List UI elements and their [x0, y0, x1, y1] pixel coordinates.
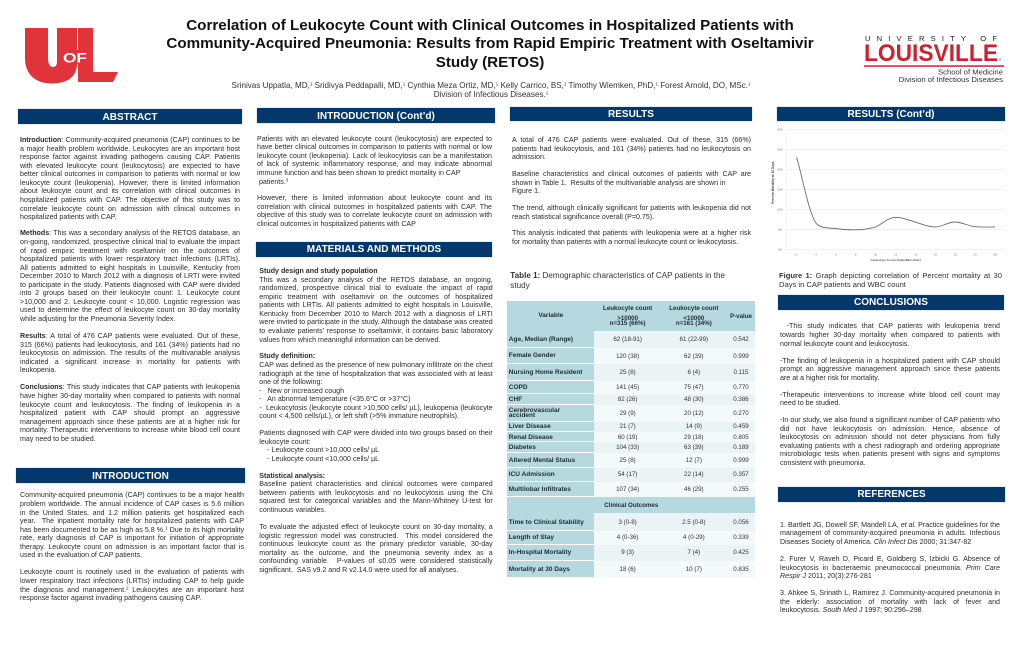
table: demographics and outcomes: 20 (12)	[684, 410, 704, 417]
line chart: percent mortality by leukocyte count: 16	[934, 253, 937, 257]
text: abstract introduction: hospitalized patients with CAP. The objective of this study was to	[20, 196, 240, 204]
text: study design: Kentucky from December 2010 to March 2012 with a diagnosis of LRTI	[259, 310, 493, 318]
table: demographics and outcomes: 25 (8)	[620, 369, 636, 376]
table header row: <10000	[683, 315, 704, 322]
table: demographics and outcomes: COPD	[509, 384, 528, 391]
panel: abstract	[17, 108, 243, 443]
table: demographics and outcomes: 141 (45)	[616, 384, 639, 391]
text: conclusion 4: leukocytosis on admission should not deter physicians from fully	[780, 433, 1000, 441]
panel: table 1	[507, 271, 755, 578]
table: demographics and outcomes: 3 (0-8)	[619, 519, 637, 526]
table: demographics and outcomes: 0.459	[733, 423, 749, 430]
text: results paragraph 2	[512, 170, 751, 195]
table: demographics and outcomes: Renal Disease	[509, 434, 553, 441]
table: demographics and outcomes: 14 (9)	[686, 423, 702, 430]
title: Correlation of Leukocyte Count with Clinical Outcomes in Hospitalized Patients with	[186, 17, 794, 34]
text: regression model: logistic regression model was constructed. This model considered the	[259, 532, 493, 540]
table: demographics and outcomes: 0.357	[733, 471, 749, 478]
text: conclusion 1: -This study indicates that CAP patients with leukopenia trend	[787, 322, 1000, 330]
text: introduction paragraph 1	[20, 491, 244, 559]
table: demographics and outcomes: 107 (34)	[616, 486, 639, 493]
text: introduction paragraph 2: response factor against invading pathogens causing CAP.	[20, 594, 201, 602]
figure caption: Figure 1: Graph depicting correlation of Percent mortality at 30	[779, 271, 1002, 280]
text: abstract introduction: a major health problem worldwide. Leukocytes are an important host	[20, 145, 240, 153]
text: reference 3: the elderly: association of mortality with lack of fever and	[780, 598, 1000, 606]
text: results paragraph 2: Baseline characteristics and clinical outcomes of patients with CAP are	[512, 170, 751, 178]
text: introduction paragraph 2: Leukocyte count is routinely used in the evaluation of patients with	[20, 568, 244, 576]
table caption	[510, 271, 725, 290]
text: continued paragraph 1: patients.3	[259, 177, 288, 186]
line chart: percent mortality by leukocyte count	[771, 127, 1004, 262]
table header row: Leukocyte count	[669, 305, 718, 312]
table: demographics and outcomes: 25 (8)	[620, 457, 636, 464]
text: reference 1: Diseases Society of America. Clin Infect Dis 2000; 31:347-82	[780, 538, 971, 546]
table: demographics and outcomes: 0.425	[733, 549, 749, 556]
text: abstract methods	[20, 229, 240, 323]
line chart: percent mortality by leukocyte count: 30%	[777, 127, 783, 131]
text: abstract introduction: correlate leukocyte count on admission with clinical outcomes in	[20, 204, 240, 212]
table: demographics and outcomes: Liver Disease	[509, 423, 551, 430]
text: reference 3: 3. Ahkee S, Srinath L, Ramirez J. Community-acquired pneumonia in	[780, 589, 1000, 597]
text: abstract conclusions: hospitalized patient with CAP should prompt an aggressive	[20, 409, 240, 417]
text: abstract results: 315 (66%) patients had leukocytosis, and 161 (34%) patients had no	[20, 341, 240, 349]
text: conclusion 3: need to be studied.	[780, 399, 840, 407]
line chart: percent mortality by leukocyte count: <2	[794, 253, 798, 257]
table: demographics and outcomes: 46 (29)	[684, 486, 704, 493]
table: demographics and outcomes: 0.770	[733, 384, 749, 391]
table: demographics and outcomes: Multilobar Infiltrates	[509, 486, 571, 493]
text: abstract results	[20, 332, 240, 374]
title: Study (RETOS)	[436, 54, 544, 71]
table: demographics and outcomes: 63 (39)	[684, 444, 704, 451]
line chart: percent mortality by leukocyte count: 25%	[777, 147, 783, 151]
table: demographics and outcomes: 62 (18-91)	[613, 336, 642, 343]
text: continued paragraph 2: clinical outcomes in hospitalized patients with CAP	[257, 220, 416, 228]
text: abstract conclusions: Conclusions: This study indicates that CAP patients with leukopenia	[20, 383, 240, 391]
text: study design: Study design and study population	[259, 267, 378, 275]
text: patient groups: leukocyte count:	[259, 438, 311, 446]
logo: University of Louisville: LOUISVILLE	[864, 40, 998, 67]
text: abstract methods: All patients admitted to eight hospitals in Louisville, Kentucky from	[20, 264, 240, 272]
text: reference 1	[780, 521, 1000, 546]
table: demographics and outcomes: 10 (7)	[686, 566, 702, 573]
text: reference 1: 1. Bartlett JG, Dowell SF, Mandell LA, et al. Practice guidelines for the	[780, 521, 1000, 529]
table: demographics and outcomes: 0.339	[733, 534, 749, 541]
text: statistical analysis: squared test for categorical variables and the Mann-Whitney U-test for	[259, 497, 493, 505]
table: demographics and outcomes: 120 (38)	[616, 353, 639, 360]
table: demographics and outcomes: Mortality at 30 Days	[509, 566, 570, 573]
line chart: percent mortality by leukocyte count: 6	[835, 253, 837, 257]
text: abstract introduction: response factor against invading pathogens causing CAP. Patients	[20, 153, 240, 161]
text: study design: were invited to participate in the study. Although the database was created	[259, 318, 493, 326]
text: regression model: mortality as the outcome, and the pneumonia severity index as a	[259, 549, 493, 557]
heading: conclusions: CONCLUSIONS	[854, 297, 928, 308]
text: conclusion 3	[780, 391, 1000, 407]
table header row: n=315 (66%)	[610, 320, 646, 327]
heading: results: RESULTS	[608, 109, 654, 120]
table: demographics and outcomes: 0.805	[733, 434, 749, 441]
text: conclusion 2: are at a higher risk for mortality.	[780, 374, 879, 382]
text: results paragraph 1	[512, 136, 751, 161]
text: continued paragraph 1: of lack of systemic inflammatory response, and may indicate abnormal	[257, 160, 492, 168]
line chart: percent mortality by leukocyte count: 0%	[778, 247, 783, 251]
table: demographics and outcomes: Diabetes	[509, 444, 536, 451]
table section: clinical outcomes	[507, 497, 755, 513]
table: demographics and outcomes: CHF	[509, 396, 522, 403]
text: abstract methods: to participate in the study. Patients diagnosed with CAP were divided	[20, 281, 240, 289]
text: abstract introduction: about leukocyte count and its correlation with clinical outcomes in	[20, 187, 240, 195]
table: demographics and outcomes: 62 (39)	[684, 353, 704, 360]
text: reference 2: 2. Furer V, Raveh D, Picard E, Goldberg S, Izbicki G. Absence of	[780, 555, 1000, 563]
text: abstract methods: hospitalized patients with lower respiratory tract infections (LRTIs).	[20, 255, 240, 263]
logo: University of Louisville: School of Medicine	[938, 68, 1003, 76]
table: demographics and outcomes: Time to Clinical Stability	[509, 519, 584, 526]
panel: introduction continued	[256, 107, 496, 228]
text: continued paragraph 2: correlation with clinical outcomes in hospitalized patients with CAP. The	[257, 203, 492, 211]
line chart: percent mortality by leukocyte count: 4	[815, 253, 817, 257]
panel: results	[509, 106, 753, 246]
panel: references	[777, 486, 1006, 614]
text: introduction paragraph 1: rate, early diagnosis of CAP is important for initiation of appropriate	[20, 534, 244, 542]
table: demographics and outcomes: Length of Stay	[509, 534, 554, 541]
table: demographics and outcomes: 54 (17)	[618, 471, 637, 478]
text: regression model: To evaluate the adjusted effect of leukocyte count on 30-day mortality, a	[259, 523, 493, 531]
text: introduction paragraph 1: year. The inpatient mortality rate for hospitalized patients with CAP	[20, 517, 244, 525]
authors and affiliation: Srinivas Uppatla, MD,1 Sridivya Peddapalli, MD,1 Cynthia Meza Ortiz, MD,1 Kelly Carrico, BS,1 Timothy Wiemken, PhD,1 Forest Arnold, DO, MSc.1	[232, 81, 750, 90]
table: demographics and outcomes: 0.056	[733, 519, 749, 526]
text: results paragraph 2: Figure 1.	[512, 187, 540, 195]
text: introduction paragraph 2	[20, 568, 244, 602]
table: demographics and outcomes	[507, 301, 755, 578]
text: study design	[259, 267, 493, 344]
line chart: percent mortality by leukocyte count: >20	[992, 253, 998, 257]
text: statistical analysis: between patients with leukocytosis and no leukocytosis using the Chi	[259, 489, 493, 497]
text: regression model	[259, 523, 493, 574]
text: reference 1: management of community-acquired pneumonia in adults. Infectious	[780, 529, 1000, 537]
heading: abstract: ABSTRACT	[102, 112, 158, 123]
logo: University of Louisville: Division of Infectious Diseases	[899, 75, 1003, 84]
text: introduction paragraph 1: problem worldwide. The annual incidence of CAP cases is 5.6 million	[20, 500, 244, 508]
heading: conclusions	[778, 295, 1004, 310]
table: demographics and outcomes: 29 (18)	[684, 434, 704, 441]
text: study definition: count < 4,500 cells/µL), or left shift (>5% immature neutrophils).	[259, 412, 459, 420]
table: demographics and outcomes: 18 (6)	[620, 566, 636, 573]
text: conclusion 2: -The finding of leukopenia in a hospitalized patient with CAP should	[780, 357, 1000, 365]
table header row: P-value	[730, 313, 752, 320]
panel: introduction	[15, 467, 246, 602]
text: reference 2: leukocytosis in bacteraemic pneumococcal pneumonia. Prim Care	[780, 564, 1000, 572]
text: abstract conclusions: may need to be studied.	[20, 435, 96, 443]
heading: references	[778, 487, 1005, 502]
text: abstract methods: used to determine the effect of leukocyte count on 30-day mortality	[20, 306, 240, 314]
line chart: percent mortality by leukocyte count: 12	[894, 253, 898, 257]
text: abstract conclusions: management approach since these patients are at a higher risk for	[20, 418, 240, 426]
text: abstract conclusions: have higher 30-day mortality when compared to patients with normal	[20, 392, 240, 400]
table: demographics and outcomes: 0.542	[733, 336, 749, 343]
logo: UofL: OF	[63, 50, 88, 66]
text: statistical analysis: Statistical analysis:	[259, 472, 325, 480]
text: continued paragraph 1: leukocyte count (leukopenia). Lack of leukocytosis can be a manifestation	[257, 152, 492, 160]
text: statistical analysis: continuous variables.	[259, 506, 326, 514]
text: continued paragraph 2	[257, 194, 492, 228]
text: study definition: - New or increased cough	[259, 387, 344, 395]
text: patient groups: - Leukocyte count >10,000 cells/ µL	[267, 446, 379, 454]
text: statistical analysis: Baseline patient characteristics and clinical outcomes were compared	[259, 480, 493, 488]
text: introduction paragraph 1: Community-acquired pneumonia (CAP) continues to be a major health	[20, 491, 244, 499]
table: demographics and outcomes: 0.835	[733, 566, 749, 573]
text: study definition: CAP was defined as the presence of new pulmonary infiltrate on the chest	[259, 361, 493, 369]
table: demographics and outcomes: 2.5 (0-8)	[682, 519, 706, 526]
text: reference 3: leukocytosis. South Med J 1997; 90:296–298	[780, 606, 922, 614]
table: demographics and outcomes: 21 (7)	[620, 423, 636, 430]
table: demographics and outcomes: 0.386	[733, 396, 749, 403]
text: continued paragraph 2: However, there is limited information about leukocyte count and its	[257, 194, 492, 202]
text: introduction paragraph 2: lower respiratory tract infections (LRTIs) including CAP to help guide	[20, 577, 244, 585]
text: regression model: confounding variable. P-values of ≤0.05 were considered statistically	[259, 557, 493, 565]
text: conclusion 2: prompt an aggressive management approach since these patients	[780, 365, 1000, 373]
table: demographics and outcomes: 82 (26)	[618, 396, 637, 403]
text: abstract results: leukocytosis on admission. The results of the multivariable analysis	[20, 349, 240, 357]
line chart: percent mortality by leukocyte count: 14	[914, 253, 918, 257]
table: demographics and outcomes: Age, Median (Range)	[509, 336, 573, 343]
text: regression model: significant. SAS v9.2 and R v2.14.0 were used for all analyses.	[259, 566, 458, 574]
text: patient groups	[259, 429, 493, 463]
table: demographics and outcomes: 60 (19)	[618, 434, 637, 441]
text: conclusion 1: towards higher 30-day mortality when compared to patients with	[780, 331, 1000, 339]
table: demographics and outcomes: accident	[509, 412, 535, 419]
text: study definition: one of the following:	[259, 378, 322, 386]
heading: results continued	[777, 107, 1005, 121]
text: study design: empiric treatment with oseltamivir on the outcomes of hospitalized	[259, 293, 493, 301]
table: demographics and outcomes: 12 (7)	[686, 457, 702, 464]
heading: abstract	[18, 109, 242, 124]
text: abstract methods: December 2010 to March 2012 with a diagnosis of LRTI were invited	[20, 272, 240, 280]
table: demographics and outcomes: 4 (0-36)	[617, 534, 638, 541]
heading: references: REFERENCES	[857, 489, 926, 500]
text: introduction paragraph 1: in the United States, and 1.2 million patients get hospitalized each	[20, 509, 244, 517]
text: reference 3	[780, 589, 1000, 615]
text: study definition: radiograph at the time of hospitalization that was associated with at least	[259, 370, 493, 378]
text: continued paragraph 1: Patients with an elevated leukocyte count (leukocytosis) are expected to	[257, 135, 492, 143]
table: demographics and outcomes: 4 (0-29)	[683, 534, 705, 541]
table: demographics and outcomes: 104 (33)	[616, 444, 639, 451]
heading: materials and methods: MATERIALS AND METHODS	[307, 244, 441, 255]
text: statistical analysis	[259, 472, 493, 514]
text: results paragraph 4	[512, 229, 751, 246]
table header row: >10000	[617, 315, 638, 322]
text: abstract methods: while adjusting for the Pneumonia Severity Index.	[20, 315, 175, 323]
text: introduction paragraph 1: used in the evaluation of CAP patients.	[20, 551, 142, 559]
text: abstract methods: of rapid empiric treatment with oseltamivir on the outcomes of	[20, 247, 240, 255]
text: conclusion 4: did not have leukocytosis on admission. Hence, absence of	[780, 425, 1000, 433]
figure caption: Days in CAP patients and WBC count	[779, 280, 906, 289]
heading: introduction: INTRODUCTION	[92, 470, 169, 482]
text: continued paragraph 1: have better clinical outcomes in comparison to patients with normal or low	[257, 143, 492, 151]
authors and affiliation	[232, 81, 750, 99]
text: conclusion 3: -Therapeutic interventions to increase white blood cell count may	[780, 391, 1000, 399]
table: demographics and outcomes: 22 (14)	[684, 471, 704, 478]
text: study definition: - Leukocytosis (leukocyte count >10,500 cells/ µL), leukopenia (leukocyte	[259, 404, 493, 412]
table caption: study	[510, 281, 530, 290]
table: demographics and outcomes: 29 (9)	[620, 410, 636, 417]
text: abstract results: leukopenia.	[20, 366, 56, 374]
text: abstract introduction: leukocyte count (leukopenia). However, there is limited information	[20, 179, 240, 187]
authors and affiliation: Division of Infectious Diseases.1	[434, 90, 548, 99]
table: demographics and outcomes: 6 (4)	[687, 369, 700, 376]
line chart: percent mortality by leukocyte count: 18	[954, 253, 957, 257]
text: study definition: - An abnormal temperature (<35.6°C or >37°C)	[259, 395, 410, 403]
heading: introduction continued	[257, 108, 495, 123]
line chart: percent mortality by leukocyte count: Percent Mortality at 30 Days	[771, 161, 775, 204]
table: demographics and outcomes: 0.999	[733, 457, 749, 464]
text: introduction paragraph 1: therapy. Leukocyte count on admission is an important factor that is	[20, 543, 244, 551]
text: reference 2	[780, 555, 1000, 580]
text: results paragraph 4: This analysis indicated that patients with leukopenia were at a higher risk	[512, 229, 751, 237]
text: conclusion 4: evaluating patients with a chest radiograph and ordering appropriate	[780, 442, 1000, 450]
panel: results continued	[771, 106, 1006, 289]
text: abstract introduction: hospitalized patients with CAP.	[20, 213, 116, 221]
table: demographics and outcomes: 48 (30)	[684, 396, 704, 403]
text: results paragraph 1: admission.	[512, 153, 546, 161]
table header row: n=161 (34%)	[676, 320, 712, 327]
text: abstract introduction: with elevated leukocyte count (leukocytosis) are expected to have	[20, 162, 240, 170]
table: demographics and outcomes: In-Hospital Mortality	[509, 549, 571, 556]
line chart: percent mortality by leukocyte count: 15%	[777, 187, 783, 191]
title: Community-Acquired Pneumonia: Results from Rapid Empiric Treatment with Oseltamivir	[166, 35, 814, 52]
table: demographics and outcomes: 9 (3)	[621, 549, 634, 556]
text: study definition	[259, 352, 493, 420]
table: demographics and outcomes: 0.270	[733, 410, 749, 417]
text: patient groups: - Leukocyte count <10,000 cells/ µL	[267, 455, 379, 463]
table: demographics and outcomes: ICU Admission	[509, 471, 555, 478]
text: results paragraph 2: shown in Table 1. Results of the multivariable analysis are shown in	[512, 179, 726, 187]
text: patient groups: Patients diagnosed with CAP were divided into two groups based on their	[259, 429, 493, 437]
table: demographics and outcomes: Female Gender	[509, 352, 556, 359]
figure caption	[779, 271, 1002, 289]
text: results paragraph 1: patients had leukocytosis, and 161 (34%) patients had no leukocytosis on	[512, 145, 751, 153]
text: results paragraph 4: for mortality than patients with a normal leukocyte count or leukocytosis.	[512, 238, 738, 246]
text: abstract methods: on-going, randomized, prospective clinical trial to evaluate the impact	[20, 238, 240, 246]
text: conclusion 4	[780, 416, 1000, 467]
panel: conclusions	[777, 294, 1005, 467]
logo: University of Louisville: UNIVERSITY OF	[865, 34, 997, 43]
text: results paragraph 1: A total of 476 CAP patients were evaluated. Out of these, 315 (66%)	[512, 136, 751, 144]
text: study design: randomized, prospective clinical trial to evaluate the impact of rapid	[259, 284, 493, 292]
text: results paragraph 3: reach statistical significance overall (P=0.75).	[512, 213, 654, 221]
table: demographics and outcomes: Cerebrovascular	[509, 407, 560, 414]
text: introduction paragraph 1: has been documented to be as high as 5.8 %.1 Due to its high mortality	[20, 525, 244, 534]
table: demographics and outcomes: 0.115	[733, 369, 748, 376]
table: demographics and outcomes: 0.999	[733, 353, 749, 360]
text: reference 2: Respir J 2011; 20(3):276-281	[780, 572, 872, 580]
text: study design: This was a secondary analysis of the RETOS database, an ongoing,	[259, 276, 493, 284]
table: demographics and outcomes: 7 (4)	[687, 549, 700, 556]
heading: materials and methods	[256, 242, 492, 257]
text: continued paragraph 1	[257, 135, 492, 186]
table section: clinical outcomes: Clinical Outcomes	[604, 502, 658, 509]
text: continued paragraph 1: immune function and has been shown to predict mortality in CAP	[257, 169, 460, 177]
text: abstract methods: >10,000 and 2. Leukocyte count < 10,000. Logistic regression was	[20, 298, 240, 306]
line chart: percent mortality by leukocyte count: Leukocyte Count (Cells/Microliter)	[871, 258, 921, 262]
text: abstract introduction: better clinical outcomes in comparison to patients with normal or low	[20, 170, 240, 178]
table: demographics and outcomes: 75 (47)	[684, 384, 704, 391]
table: demographics and outcomes: Altered Mental Status	[509, 457, 575, 464]
text: abstract introduction: Introduction: Community-acquired pneumonia (CAP) continues to be	[20, 136, 240, 144]
text: abstract conclusions	[20, 383, 240, 443]
table header row	[507, 301, 755, 331]
text: abstract conclusions: leukocyte count and leukocytosis. The finding of leukopenia in a	[20, 401, 240, 409]
text: abstract methods: Methods: This was a secondary analysis of the RETOS database, an	[20, 229, 240, 237]
text: conclusion 1	[780, 322, 1000, 348]
text: conclusion 4: microbiologic tests when patients present with signs and symptoms	[780, 450, 1000, 458]
heading: results	[510, 107, 752, 121]
text: results paragraph 3: The trend, although clinically significant for patients with leukopenia did not	[512, 204, 751, 212]
table caption: Table 1: Demographic characteristics of CAP patients in the	[510, 271, 725, 280]
logo: UofL	[25, 28, 118, 84]
line chart: percent mortality by leukocyte count: 10	[874, 253, 878, 257]
table: demographics and outcomes: Nursing Home Resident	[509, 369, 582, 376]
heading: introduction	[16, 468, 245, 482]
table: demographics and outcomes: 0.255	[733, 486, 749, 493]
text: conclusion 4: -In our study, we also found a significant number of CAP patients who	[780, 416, 1000, 424]
table: demographics and outcomes: 61 (22-99)	[680, 336, 708, 343]
text: abstract results: indicated a significant increase in mortality for patients with	[20, 358, 240, 366]
text: abstract introduction	[20, 136, 240, 221]
text: introduction paragraph 2: the diagnosis and management.2 Leukocytes are an important host	[20, 585, 244, 594]
heading: introduction continued: INTRODUCTION (Cont’d)	[317, 111, 435, 122]
line chart: percent mortality by leukocyte count: 8	[855, 253, 857, 257]
table header row: Leukocyte count	[603, 305, 652, 312]
table: demographics and outcomes: 0.189	[733, 444, 749, 451]
text: study definition: Study definition:	[259, 352, 315, 360]
text: conclusion 2	[780, 357, 1000, 382]
text: continued paragraph 2: objective of this study was to correlate leukocyte count on admission with	[257, 211, 492, 219]
text: regression model: continuous leukocyte count as the primary predictor variable, 30-day	[259, 540, 493, 548]
text: abstract conclusions: mortality. Therapeutic interventions to increase white blood cell count	[20, 426, 240, 434]
heading: results continued: RESULTS (Cont’d)	[847, 109, 935, 120]
logo: University of Louisville	[864, 34, 1004, 84]
panel: materials and methods	[255, 241, 493, 574]
text: abstract results: Results: A total of 476 CAP patients were evaluated. Out of these,	[20, 332, 240, 340]
table header row: Variable	[538, 312, 563, 319]
line chart: percent mortality by leukocyte count: 20%	[777, 167, 783, 171]
text: study design: values from which meaningful information can be derived.	[259, 336, 440, 344]
line chart: percent mortality by leukocyte count: 10%	[777, 207, 783, 211]
text: study design: to evaluate patients’ response to oseltamivir, it contains basic laboratory	[259, 327, 493, 335]
text: study design: patients with LRTIs. All patients admitted to eight hospitals in Louisville,	[259, 301, 493, 309]
title	[166, 17, 814, 71]
line chart: percent mortality by leukocyte count: 5%	[778, 227, 783, 231]
text: conclusion 4: consistent with pneumonia.	[780, 459, 866, 467]
line chart: percent mortality by leukocyte count: 20	[973, 253, 977, 257]
text: abstract methods: into 2 groups based on their leukocyte count: 1. Leukocyte count	[20, 289, 240, 297]
text: conclusion 1: normal leukocyte count and leukocytosis.	[780, 340, 909, 348]
text: results paragraph 3	[512, 204, 751, 221]
